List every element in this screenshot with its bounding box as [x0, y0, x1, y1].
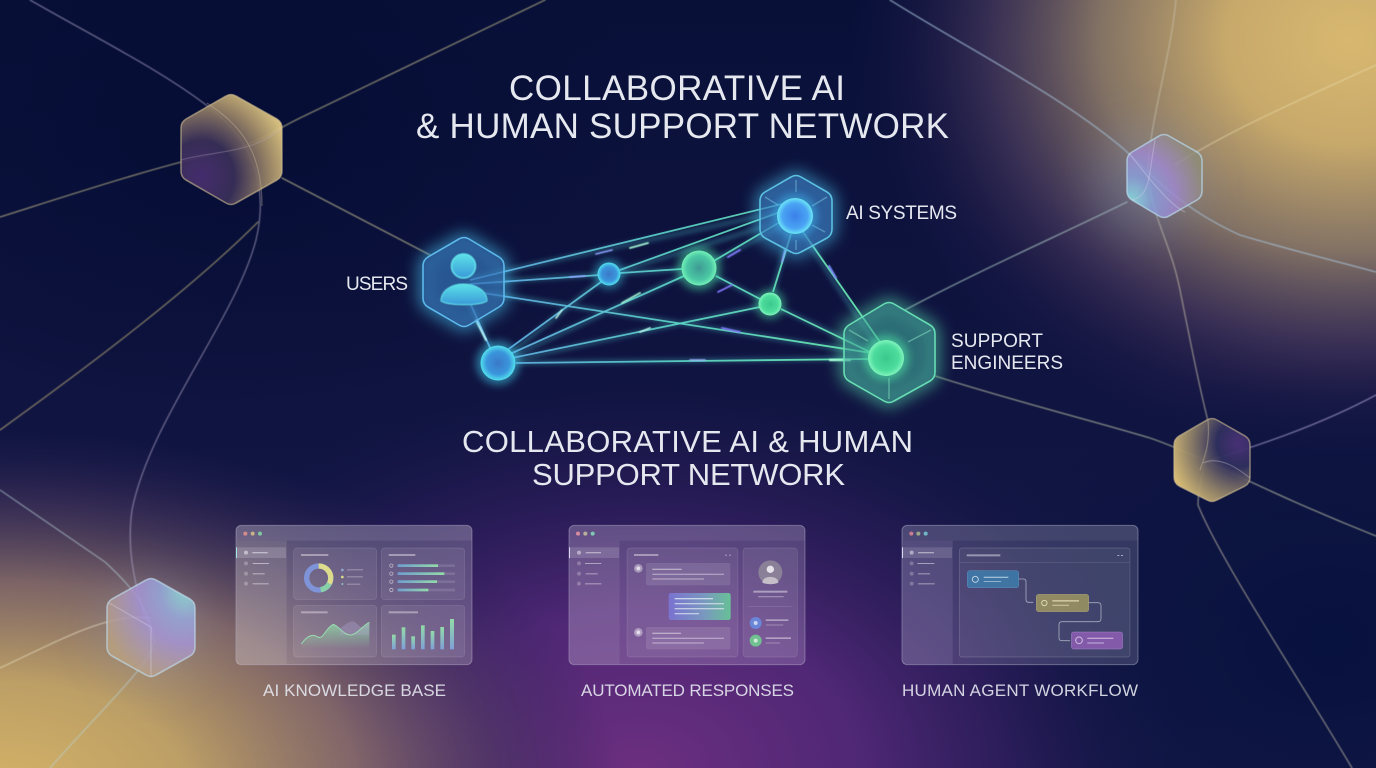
title	[416, 69, 949, 146]
workflow step: purple	[1071, 632, 1123, 649]
decorative hexagon: top left gold	[181, 94, 282, 206]
node: lower-left hub	[476, 341, 520, 385]
node: support engineers hexagon	[844, 302, 935, 402]
caption: automated responses: AUTOMATED RESPONSES	[581, 681, 794, 700]
panel: human agent workflow	[902, 525, 1138, 665]
workflow step: gold	[1036, 594, 1089, 612]
workflow arrows	[1019, 579, 1101, 641]
label: support engineers: ENGINEERS	[951, 353, 1063, 374]
panel: automated responses chat	[569, 525, 805, 665]
workflow step: blue	[967, 571, 1019, 588]
decorative hexagon: bottom left blue	[99, 575, 203, 679]
subtitle	[462, 424, 913, 492]
title: & HUMAN SUPPORT NETWORK	[416, 107, 949, 146]
node: small blue hub	[594, 259, 624, 289]
card: progress bars	[381, 548, 465, 600]
decorative hexagon: right gold	[1174, 418, 1250, 502]
label: support engineers	[951, 331, 1063, 374]
node: users hexagon	[423, 238, 504, 326]
node: small green hub	[755, 289, 785, 319]
subtitle: SUPPORT NETWORK	[532, 457, 845, 492]
card: conversation	[627, 548, 738, 657]
card: donut chart	[294, 548, 377, 600]
decorative hexagon: top right blue	[1090, 130, 1202, 240]
card: area chart	[294, 605, 377, 657]
label: AI systems: AI SYSTEMS	[846, 203, 957, 224]
label: support engineers: SUPPORT	[951, 331, 1043, 352]
network diagram	[423, 176, 935, 402]
panel: AI knowledge base dashboard	[236, 525, 472, 665]
connection lines	[470, 204, 880, 363]
caption: AI knowledge base: AI KNOWLEDGE BASE	[263, 681, 446, 700]
card: agent profile	[743, 548, 797, 657]
subtitle: COLLABORATIVE AI & HUMAN	[462, 424, 913, 459]
edge glow	[468, 212, 886, 363]
title: COLLABORATIVE AI	[509, 69, 845, 108]
icon: person	[441, 254, 487, 305]
card: workflow canvas	[959, 548, 1130, 657]
card: bar chart	[381, 605, 465, 657]
label: users: USERS	[346, 274, 408, 295]
energy sparks	[476, 243, 850, 360]
node: AI systems hexagon	[760, 176, 832, 254]
node: green hub	[677, 246, 721, 290]
caption: human agent workflow: HUMAN AGENT WORKFLOW	[902, 681, 1138, 700]
